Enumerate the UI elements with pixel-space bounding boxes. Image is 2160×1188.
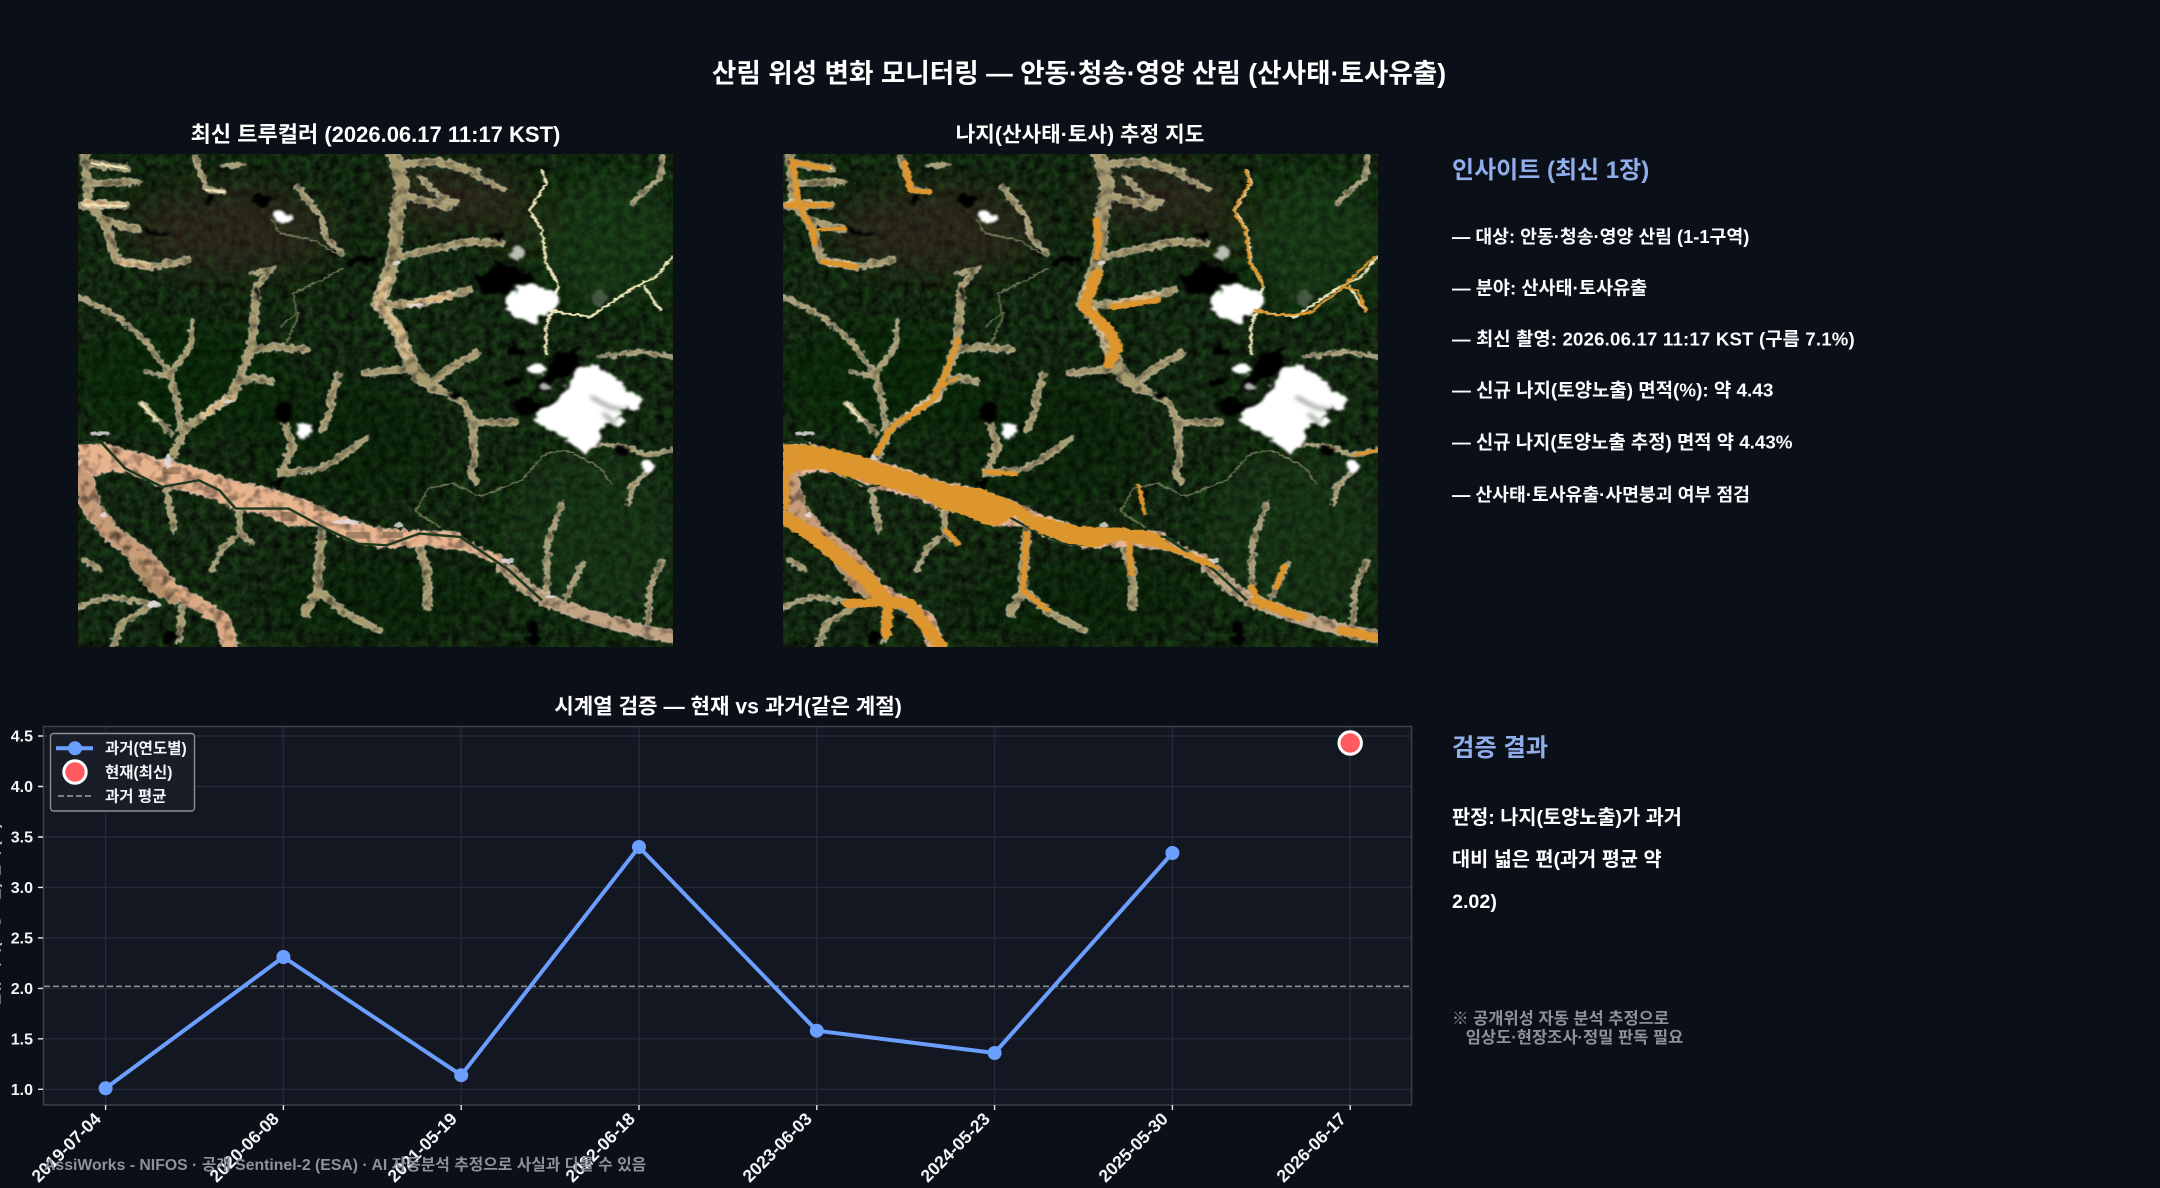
y axis labels: 2.0 [11, 981, 33, 998]
insight: check items: — 산사태·토사유출·사면붕괴 여부 점검 [1452, 483, 1750, 504]
legend: 과거(연도별) [105, 740, 187, 758]
insight: target: — 대상: 안동·청송·영양 산림 (1-1구역) [1452, 225, 1749, 246]
verdict text: 대비 넓은 편(과거 평균 약 [1452, 848, 1662, 870]
legend: 현재(최신) [105, 764, 172, 782]
verdict text: 판정: 나지(토양노출)가 과거 [1452, 806, 1682, 828]
field patches in the plain [162, 467, 403, 539]
title: 산림 위성 변화 모니터링 — 안동·청송·영양 산림 (산사태·토사유출) [712, 59, 1446, 89]
panel: true colour satellite image [78, 154, 673, 647]
x axis date labels: 2023-06-03 [738, 1109, 816, 1186]
x axis date labels: 2019-07-04 [27, 1109, 105, 1186]
verdict text [1452, 806, 1682, 912]
tonal patches: brown ridges and light forest [76, 167, 681, 640]
thin roads [272, 220, 611, 527]
chart: time series [0, 726, 1412, 1186]
forest base texture [78, 154, 673, 647]
warm fields inside the central valley [85, 203, 452, 415]
panel: validation result [1452, 734, 1683, 1047]
y axis labels: 3.0 [11, 880, 33, 897]
y axis labels: 3.5 [11, 830, 33, 846]
tributary valleys [78, 154, 673, 647]
heading: validation result: 검증 결과 [1452, 734, 1548, 761]
main river plain [78, 442, 673, 647]
base image [781, 154, 1386, 647]
clouds [273, 213, 653, 472]
x axis date labels: 2021-05-19 [383, 1109, 461, 1186]
past mean line [44, 985, 1411, 987]
disclaimer note: ※ 공개위성 자동 분석 추정으로 임상도·현장조사·정밀 판독 필요 [1452, 1010, 1683, 1047]
y axis labels: 1.0 [11, 1082, 33, 1099]
y axis labels: 4.0 [11, 779, 33, 796]
panel: insights [1452, 156, 1855, 504]
current value marker [1339, 732, 1361, 754]
x axis date labels: 2022-06-18 [561, 1109, 639, 1186]
villages [91, 261, 555, 608]
legend: 과거 평균 [105, 788, 166, 806]
insight: estimated bare area: — 신규 나지(토양노출 추정) 면적 약 4.43% [1452, 432, 1792, 453]
y axis labels: 2.5 [11, 930, 33, 948]
plot area [44, 726, 1412, 1105]
insight: bare area percent: — 신규 나지(토양노출) 면적(%): 약 4.43 [1452, 380, 1773, 401]
chart title: 시계열 검증 — 현재 vs 과거(같은 계절) [554, 695, 902, 718]
x axis date labels: 2024-05-23 [916, 1109, 994, 1186]
orange bare ground overlay [783, 160, 1378, 647]
y axis labels: 4.5 [11, 728, 33, 746]
x axis date labels: 2020-06-08 [205, 1109, 283, 1186]
past series line [99, 840, 1179, 1095]
x axis date labels: 2025-05-30 [1094, 1109, 1172, 1186]
cloud shadows and lakes [144, 193, 630, 647]
river channel [78, 442, 542, 600]
insight: latest capture: — 최신 촬영: 2026.06.17 11:17 KST (구름 7.1%) [1452, 329, 1855, 350]
heading: bare ground map panel: 나지(산사태·토사) 추정 지도 [956, 122, 1204, 146]
bright road line [85, 163, 673, 420]
panel: bare ground estimate map [783, 154, 1378, 647]
y axis labels: 1.5 [11, 1032, 33, 1048]
heading: insights: 인사이트 (최신 1장) [1452, 156, 1649, 184]
verdict text: 2.02) [1452, 890, 1497, 912]
x axis date labels: 2026-06-17 [1272, 1109, 1350, 1186]
y axis labels [11, 728, 33, 1099]
insight: field: — 분야: 산사태·토사유출 [1452, 277, 1647, 298]
heading: true colour panel: 최신 트루컬러 (2026.06.17 11:17 KST) [191, 122, 560, 147]
dark gaps inside the large cloud [591, 397, 624, 424]
legend [50, 734, 194, 811]
footer credit: AssiWorks - NIFOS · 공개 Sentinel-2 (ESA) · AI 자동분석 추정으로 사실과 다를 수 있음 [44, 1157, 646, 1174]
x axis date labels [27, 1109, 1350, 1186]
